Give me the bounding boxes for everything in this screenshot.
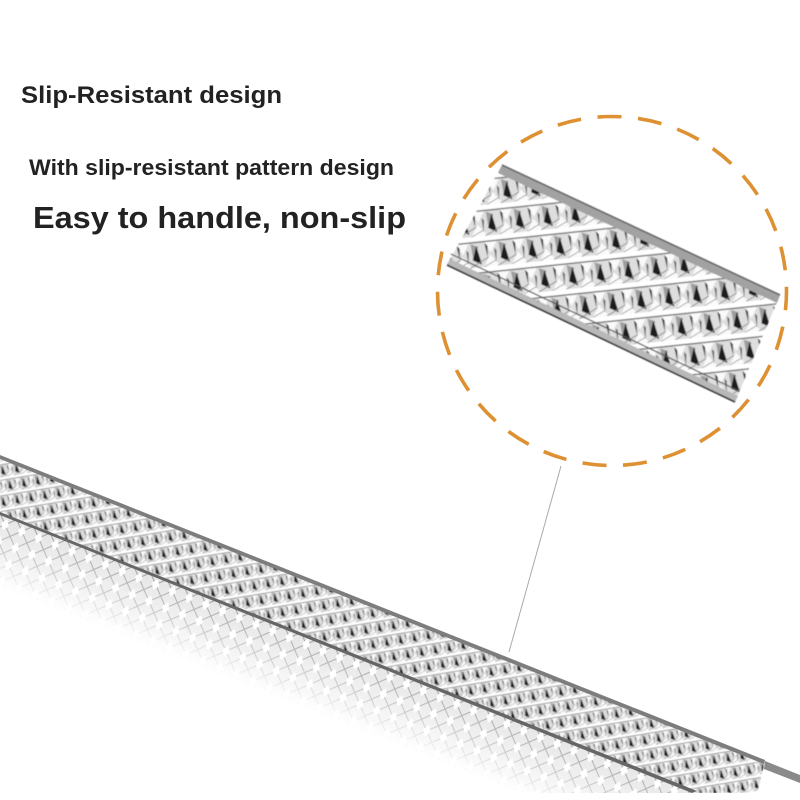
steel shaft end (764, 761, 800, 783)
tagline: easy to handle: Easy to handle, non-slip (33, 200, 406, 235)
heading: slip-resistant design: Slip-Resistant design (21, 82, 282, 109)
rod lower edge (0, 512, 697, 793)
rod upper edge (0, 455, 765, 764)
subheading: pattern design: With slip-resistant pattern design (29, 155, 394, 180)
knurled handle rod (0, 456, 765, 793)
dashed orange magnifier circle (438, 116, 786, 466)
handle with reflection (0, 455, 800, 793)
leader line from handle to magnifier (509, 466, 561, 652)
magnified handle texture (447, 165, 780, 402)
handle reflection (0, 514, 697, 793)
